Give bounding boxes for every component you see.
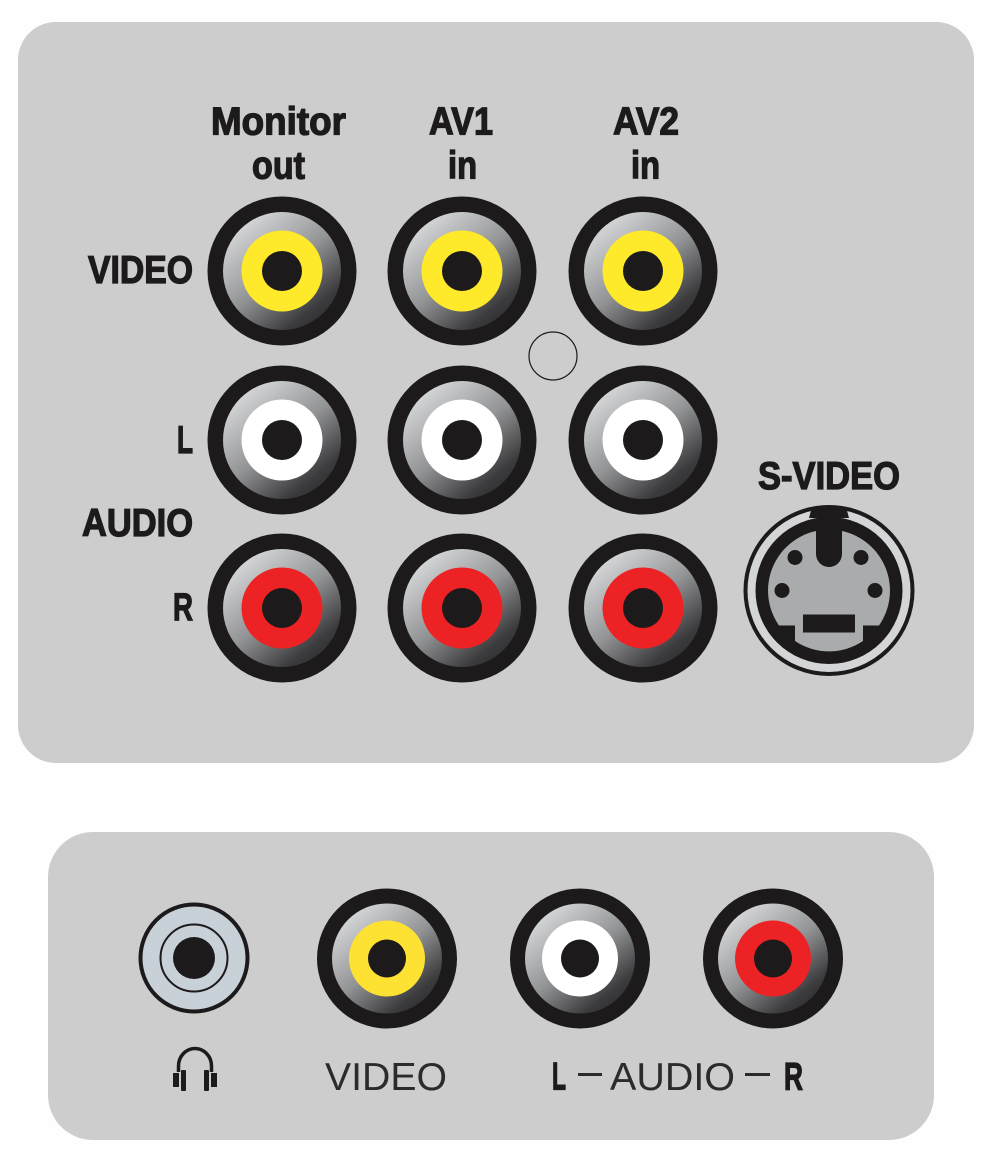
label: L - AUDIO - R: L — [552, 1056, 566, 1098]
jack: AV1 audio R — [388, 534, 536, 682]
heading: AV2 in: AV2 — [613, 100, 679, 144]
jack: monitor video — [208, 196, 356, 346]
heading: Monitor out — [211, 100, 346, 188]
small screw circle — [529, 332, 577, 380]
jack: AV1 video — [388, 196, 536, 346]
jack: front audio R — [703, 888, 843, 1028]
panel: rear connector panel — [18, 22, 974, 763]
label: L - AUDIO - R — [552, 1056, 803, 1099]
label: R: R — [173, 586, 193, 629]
jack: AV1 audio L — [388, 366, 536, 514]
label: S-VIDEO: S-VIDEO — [758, 455, 900, 498]
jack: AV2 video — [568, 196, 718, 346]
heading: AV2 in — [613, 100, 679, 188]
heading: AV2 in: in — [631, 144, 660, 188]
label: VIDEO: VIDEO — [325, 1056, 447, 1099]
label: L - AUDIO - R: AUDIO — [610, 1056, 735, 1099]
jack: headphone socket — [140, 904, 248, 1012]
heading: AV1 in — [429, 100, 493, 188]
panel: front connector panel — [48, 832, 934, 1140]
label: AUDIO: AUDIO — [82, 502, 193, 545]
jack: front video — [317, 888, 457, 1028]
heading: Monitor out: out — [252, 144, 305, 188]
heading: Monitor out: Monitor — [211, 100, 346, 144]
heading: AV1 in: AV1 — [429, 100, 493, 144]
icon: S-Video socket — [746, 507, 912, 674]
label: L: L — [177, 419, 193, 462]
jack: monitor audio R — [208, 534, 356, 682]
label: VIDEO: VIDEO — [88, 249, 193, 292]
jack: AV2 audio L — [568, 366, 718, 514]
jack: AV2 audio R — [568, 534, 718, 682]
label: L - AUDIO - R: R — [784, 1056, 803, 1098]
jack: monitor audio L — [208, 366, 356, 514]
icon: headphones — [173, 1048, 217, 1091]
jack: front audio L — [510, 888, 650, 1028]
heading: AV1 in: in — [448, 144, 477, 188]
